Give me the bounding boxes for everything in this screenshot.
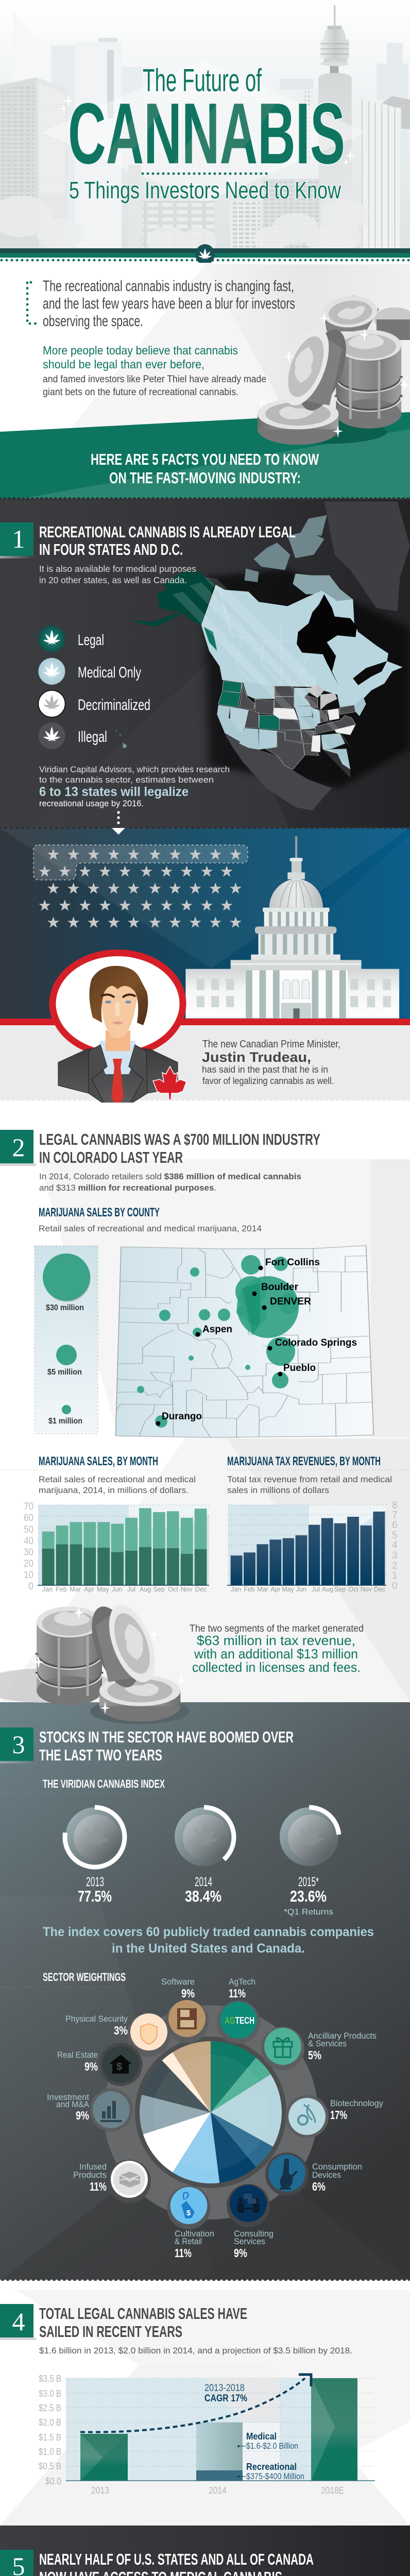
chart: marijuana tax revenues by month: 7 — [392, 1510, 398, 1521]
Viridian estimate text: Viridian Capital Advisors, which provides research — [39, 765, 230, 774]
index ring 2013 — [65, 1807, 125, 1905]
slice: Investment — [140, 2095, 211, 2134]
intro highlight text: More people today believe that cannabis — [43, 344, 238, 357]
coin sparkles — [33, 1606, 186, 1715]
label: infused — [73, 2162, 107, 2193]
slice: Physical Security — [162, 2053, 211, 2112]
chart: marijuana sales by month: 70 — [24, 1501, 33, 1512]
chart: marijuana tax revenues by month: Jun — [296, 1586, 306, 1593]
Trudeau caption: The new Canadian Prime Minister, — [202, 1039, 340, 1050]
slice: Real Estate — [142, 2060, 211, 2112]
index ring 2013: 77.5% — [78, 1887, 112, 1905]
label: physical security — [65, 2014, 128, 2037]
chart: marijuana tax revenues by month: Sep — [334, 1586, 346, 1593]
chart: marijuana tax revenues by month: Nov — [361, 1586, 372, 1593]
label: consulting — [234, 2229, 274, 2260]
chart: marijuana sales by month: Jan — [42, 1586, 53, 1593]
bubble size legend: $1 million — [48, 1417, 82, 1426]
index ring 2015: 23.6% — [290, 1887, 327, 1905]
label: consumption: 6% — [312, 2180, 326, 2193]
county map heading: Retail sales of recreational and medical marijuana, 2014 — [39, 1224, 262, 1233]
portrait — [49, 950, 186, 1109]
header band — [0, 244, 410, 265]
sector weightings pie chart — [104, 2005, 318, 2219]
Trudeau caption: favor of legalizing cannabis as well. — [202, 1076, 334, 1086]
chart: marijuana sales by month: 60 — [24, 1513, 33, 1523]
chart: legal cannabis sales: $1.5 B — [39, 2432, 61, 2443]
city markers and names — [156, 1257, 357, 1426]
chart: legal cannabis sales: $3.5 B — [39, 2374, 61, 2384]
intro lead text: observing the space. — [43, 313, 143, 330]
chart: legal cannabis sales: 2013 — [91, 2485, 109, 2496]
Viridian estimate text: 6 to 13 states will legalize — [39, 785, 189, 799]
legend: illegal — [38, 722, 107, 749]
icon: consumption devices — [265, 2153, 309, 2196]
arrow — [112, 811, 125, 835]
index heading: THE VIRIDIAN CANNABIS INDEX — [43, 1777, 165, 1790]
label: real estate: Real Estate — [57, 2050, 98, 2060]
intro lead text — [43, 278, 295, 330]
label: physical security: Physical Security — [65, 2014, 128, 2024]
section 1 heading — [39, 523, 296, 558]
medical annotation: $1.6-$2.0 Billion — [246, 2441, 298, 2451]
section 2 heading — [39, 1130, 320, 1166]
intro lead text: The recreational cannabis industry is changing fast, — [43, 278, 294, 295]
chart: marijuana tax revenues by month: Aug — [322, 1586, 333, 1593]
section 1 intro text: in 20 other states, as well as Canada. — [39, 575, 187, 585]
index coverage text: in the United States and Canada. — [112, 1941, 305, 1956]
facts banner: HERE ARE 5 FACTS YOU NEED TO KNOW — [91, 450, 319, 468]
Trudeau caption: has said in the past that he is in — [202, 1064, 328, 1075]
states highlight box — [33, 845, 248, 880]
icon: consulting services — [227, 2184, 270, 2227]
bar: 2014 — [196, 2422, 243, 2481]
label: biotechnology — [330, 2098, 383, 2122]
section 3 heading: THE LAST TWO YEARS — [39, 1746, 162, 1764]
chart: marijuana sales by month: Sep — [153, 1586, 165, 1593]
Viridian estimate text — [39, 765, 230, 808]
chart: marijuana tax revenues by month: Mar — [257, 1586, 268, 1593]
label: investment: 9% — [76, 2109, 89, 2122]
label: biotechnology: Biotechnology — [330, 2098, 383, 2108]
section 1 heading: RECREATIONAL CANNABIS IS ALREADY LEGAL — [39, 523, 296, 541]
capitol building — [185, 836, 399, 1019]
section 3: stocks — [0, 1702, 410, 2281]
legend: decriminalized — [38, 690, 150, 717]
icon: cultivation and retail: $ — [186, 2209, 191, 2217]
slice: Software — [173, 2041, 211, 2112]
section 3 heading — [39, 1728, 294, 1764]
index ring 2015: *Q1 Returns — [284, 1908, 333, 1917]
county map heading: MARIJUANA SALES BY COUNTY — [39, 1206, 160, 1219]
chart: marijuana tax revenues by month: Total tax revenue from retail and medical — [227, 1475, 392, 1484]
CAGR annotation: 2013-2018 — [204, 2383, 245, 2394]
slice: Infused — [143, 2112, 211, 2172]
chart: marijuana sales by month: 0 — [28, 1581, 33, 1592]
section 5: medical access — [0, 2526, 410, 2576]
label: agtech: AgTech — [229, 1977, 255, 1987]
map legend — [38, 625, 150, 749]
county map heading — [39, 1206, 262, 1233]
index coverage text — [43, 1925, 374, 1956]
Viridian estimate text: to the cannabis sector, estimates between — [39, 775, 214, 785]
chart: legal cannabis sales: $0.0 — [45, 2476, 61, 2486]
growth arrow — [80, 2375, 311, 2432]
label: ancillary — [308, 2031, 377, 2062]
chart: legal cannabis sales: $2.5 B — [39, 2403, 61, 2413]
section 4 paragraph: $1.6 billion in 2013, $2.0 billion in 2014, and a projection of $3.5 billion by 2018. — [39, 2346, 352, 2355]
chart: marijuana tax revenues by month: 2 — [392, 1561, 398, 1571]
chart: marijuana tax revenues by month: 4 — [392, 1540, 398, 1551]
label: real estate — [57, 2050, 98, 2073]
section 4: total sales — [0, 2282, 410, 2526]
chart: marijuana sales by month: Aug — [140, 1586, 151, 1593]
tax revenue callout: collected in licenses and fees. — [192, 1659, 361, 1675]
city markers and names: Boulder — [261, 1282, 299, 1293]
chart: marijuana sales by month: May — [97, 1586, 110, 1593]
chart: legal cannabis sales: $0.5 B — [39, 2461, 61, 2471]
label: consumption: Devices — [312, 2170, 341, 2180]
label: infused: Infused — [79, 2162, 107, 2172]
chart: marijuana sales by month — [0, 1454, 209, 1593]
chart: legal cannabis sales: $1.0 B — [39, 2447, 61, 2457]
section 1 heading: IN FOUR STATES AND D.C. — [39, 540, 183, 558]
index ring 2014: 38.4% — [185, 1887, 221, 1905]
chart: legal cannabis sales: 2018E — [321, 2485, 344, 2496]
label: consulting: 9% — [234, 2246, 247, 2260]
chart: marijuana sales by month: Mar — [70, 1586, 81, 1593]
chart: marijuana tax revenues by month: 0 — [392, 1581, 398, 1591]
city markers and names: Aspen — [202, 1324, 232, 1335]
section 5 heading — [39, 2550, 314, 2576]
chart: marijuana sales by month: Feb — [56, 1586, 67, 1593]
bubble size legend — [35, 1246, 98, 1434]
icon: ancillary products — [261, 2027, 304, 2070]
chart: marijuana tax revenues by month: Apr — [270, 1586, 281, 1593]
sparkles — [61, 94, 355, 166]
label: cultivation — [175, 2229, 214, 2260]
section 3 number badge: 3 — [12, 1730, 25, 1759]
city markers and names: Pueblo — [283, 1363, 316, 1374]
label: agtech: 11% — [229, 1987, 246, 2000]
section 1 intro text: It is also available for medical purposes — [39, 564, 196, 574]
stars — [39, 849, 242, 928]
legend: decriminalized: Decriminalized — [78, 697, 150, 714]
chart: marijuana tax revenues by month: 6 — [392, 1520, 398, 1531]
bar: 2013 — [80, 2434, 128, 2481]
label: investment: and M&A — [56, 2099, 90, 2109]
city markers and names: Colorado Springs — [275, 1337, 357, 1348]
chart: marijuana sales by month: Oct — [168, 1586, 178, 1593]
label: agtech — [229, 1977, 255, 2000]
section 2 paragraph: and $313 million for recreational purposes. — [39, 1183, 216, 1193]
intro body text: and famed investors like Peter Thiel have already made — [43, 374, 266, 385]
intro section — [0, 263, 410, 433]
label: infused: 11% — [90, 2180, 107, 2193]
section 1 number badge: 1 — [12, 524, 25, 553]
icon: infused products — [108, 2160, 151, 2203]
slice: Ancillary — [211, 2058, 271, 2112]
medical annotation — [237, 2431, 298, 2451]
section 2 heading: IN COLORADO LAST YEAR — [39, 1148, 183, 1166]
section 4 heading: SAILED IN RECENT YEARS — [39, 2323, 182, 2341]
chart: marijuana tax revenues by month: 3 — [392, 1550, 398, 1561]
recreational annotation: $375-$400 Million — [246, 2471, 304, 2481]
bubble size legend: $30 million — [46, 1303, 84, 1312]
label: software: Software — [161, 1977, 195, 1987]
city skyline — [0, 5, 410, 254]
Trudeau caption: Justin Trudeau, — [202, 1049, 311, 1065]
slice: AgTech — [211, 2041, 256, 2112]
section 4 number badge — [0, 2304, 36, 2340]
facts banner: ON THE FAST-MOVING INDUSTRY: — [109, 469, 301, 487]
chart: legal cannabis sales — [39, 2374, 375, 2496]
title: The Future of — [143, 63, 262, 98]
label: ancillary: 5% — [308, 2048, 321, 2062]
label: infused: Products — [73, 2170, 107, 2180]
tax revenue callout: with an additional $13 million — [194, 1646, 358, 1662]
intro highlight text: should be legal than ever before, — [43, 358, 204, 371]
label: cultivation: Cultivation — [175, 2229, 214, 2239]
chart: legal cannabis sales: $2.0 B — [39, 2417, 61, 2428]
chart: marijuana sales by month: marijuana, 2014, in millions of dollars. — [39, 1485, 189, 1495]
dotted bracket — [27, 282, 39, 324]
section 4 heading — [39, 2304, 247, 2341]
label: real estate: 9% — [84, 2060, 98, 2073]
label: cultivation: 11% — [175, 2246, 192, 2260]
icon: maple leaf — [153, 1066, 186, 1100]
chart: marijuana tax revenues by month: sales in millions of dollars — [227, 1485, 329, 1495]
chart: marijuana sales by month: 50 — [24, 1524, 33, 1535]
sector weightings heading: SECTOR WEIGHTINGS — [43, 1971, 126, 1984]
intro body text — [43, 374, 266, 398]
label: ancillary: & Services — [308, 2039, 347, 2048]
recreational annotation — [237, 2462, 304, 2481]
Trudeau panel — [0, 950, 410, 1109]
chart: marijuana sales by month: Nov — [181, 1586, 193, 1593]
icon: biotechnology — [285, 2095, 329, 2138]
chart: marijuana tax revenues by month: May — [282, 1586, 295, 1593]
sector labels — [47, 1977, 383, 2260]
header section — [0, 0, 410, 265]
section 3 heading: STOCKS IN THE SECTOR HAVE BOOMED OVER — [39, 1728, 294, 1746]
label: consumption: Consumption — [312, 2162, 362, 2172]
section 2 paragraph — [39, 1172, 301, 1193]
chart: marijuana tax revenues by month: Feb — [244, 1586, 255, 1593]
index ring 2015 — [279, 1807, 339, 1917]
label: investment — [47, 2092, 90, 2122]
chart: marijuana tax revenues by month: Jul — [312, 1586, 320, 1593]
section 5 number badge — [0, 2550, 33, 2576]
section 2 paragraph: In 2014, Colorado retailers sold $386 million of medical cannabis — [39, 1172, 301, 1181]
recreational annotation: Recreational — [246, 2462, 297, 2472]
icon: real estate — [99, 2043, 142, 2086]
chart: marijuana tax revenues by month: Oct — [348, 1586, 358, 1593]
label: software: 9% — [181, 1987, 195, 2000]
facts banner — [0, 412, 410, 499]
city markers and names: DENVER — [270, 1296, 311, 1307]
chart: legal cannabis sales: $3.0 B — [39, 2388, 61, 2399]
intro highlight text — [43, 344, 238, 371]
section 2 number badge — [0, 1130, 36, 1166]
map of North America — [115, 501, 410, 810]
chart: marijuana sales by month: Retail sales of recreational and medical — [39, 1475, 196, 1484]
chart: marijuana sales by month: 40 — [24, 1536, 33, 1547]
icon: cultivation and retail — [167, 2186, 210, 2229]
label: cultivation: & Retail — [175, 2236, 202, 2246]
intro body text: giant bets on the future of recreational cannabis. — [43, 387, 238, 398]
chart: marijuana tax revenues by month: 8 — [392, 1500, 398, 1511]
icon: investment — [90, 2088, 133, 2131]
tax revenue callout: $63 million in tax revenue, — [197, 1633, 355, 1648]
legend: illegal: Illegal — [78, 728, 107, 745]
capitol section — [0, 811, 410, 1025]
icon: real estate: $ — [116, 2061, 122, 2073]
label: consulting: Consulting — [234, 2229, 274, 2239]
county bubbles — [137, 1255, 299, 1428]
icon: software — [165, 2000, 209, 2043]
label: physical security: 3% — [114, 2024, 128, 2037]
chart: marijuana tax revenues by month: Jan — [231, 1586, 241, 1593]
index ring 2015: 2015* — [298, 1875, 319, 1889]
label: biotechnology: 17% — [330, 2108, 347, 2122]
legend: medical only — [38, 658, 141, 685]
Trudeau caption — [202, 1039, 340, 1086]
bar: 2018E — [311, 2378, 357, 2481]
chart: marijuana sales by month: Jun — [112, 1586, 122, 1593]
index ring 2014: 2014 — [195, 1875, 212, 1889]
city markers and names: Durango — [162, 1411, 202, 1422]
index coverage text: The index covers 60 publicly traded cannabis companies — [43, 1925, 374, 1939]
intro lead text: and the last few years have been a blur for investors — [43, 295, 295, 312]
CAGR annotation — [204, 2383, 247, 2404]
chart: marijuana sales by month: 20 — [24, 1558, 33, 1569]
label: investment: Investment — [47, 2092, 89, 2102]
chart: marijuana sales by month: 30 — [24, 1547, 33, 1558]
medical annotation: Medical — [246, 2431, 277, 2442]
icon: agtech — [217, 2001, 260, 2044]
Colorado county map — [115, 1246, 373, 1437]
section 1 intro text — [39, 564, 196, 585]
chart: marijuana sales by month: 10 — [24, 1570, 33, 1581]
CAGR annotation: CAGR 17% — [204, 2393, 247, 2404]
index ring 2014 — [174, 1807, 234, 1905]
slice: Biotechnology — [211, 2074, 282, 2146]
icon: coin stack — [257, 292, 410, 445]
label: ancillary: Ancilliary Products — [308, 2031, 377, 2041]
chart: marijuana sales by month: Jul — [127, 1586, 135, 1593]
tax revenue callout: The two segments of the market generated — [190, 1623, 364, 1634]
legend: medical only: Medical Only — [78, 664, 141, 681]
Viridian estimate text: recreational usage by 2016. — [39, 799, 144, 808]
section 4 number badge: 4 — [12, 2307, 25, 2336]
icon: agtech: AGTECH — [225, 2015, 254, 2026]
icon: physical security — [127, 2013, 170, 2057]
chart: legal cannabis sales: 2014 — [209, 2485, 227, 2496]
slice: Cultivation — [173, 2112, 219, 2183]
chart: marijuana sales by month: MARIJUANA SALES, BY MONTH — [39, 1454, 158, 1468]
index ring 2013: 2013 — [86, 1875, 104, 1889]
title: 5 Things Investors Need to Know — [69, 177, 341, 204]
chart: marijuana tax revenues by month: 5 — [392, 1530, 398, 1541]
label: consumption — [312, 2162, 362, 2193]
legend: legal — [38, 625, 104, 652]
legend: legal: Legal — [78, 632, 104, 649]
section 1 number badge — [0, 522, 33, 558]
bubble size legend: $5 million — [47, 1368, 82, 1377]
chart: marijuana tax revenues by month: Dec — [374, 1586, 385, 1593]
city markers and names: Fort Collins — [265, 1257, 320, 1268]
slice: Consulting — [211, 2112, 256, 2183]
label: consulting: Services — [234, 2236, 265, 2246]
section 2 number badge: 2 — [12, 1133, 25, 1162]
icon: coin stack 2 — [0, 1602, 190, 1724]
section 2: Colorado — [0, 1103, 410, 1702]
chart: marijuana sales by month: Dec — [195, 1586, 207, 1593]
slice: Consumption — [211, 2112, 273, 2167]
section 1: legal status — [0, 499, 410, 828]
chart: marijuana tax revenues by month — [227, 1454, 410, 1593]
section 3 number badge — [0, 1727, 33, 1764]
label: software — [161, 1977, 195, 2000]
title — [68, 63, 345, 204]
chart: marijuana sales by month: Apr — [84, 1586, 94, 1593]
section 4 heading: TOTAL LEGAL CANNABIS SALES HAVE — [39, 2304, 247, 2323]
tax revenue callout — [190, 1623, 364, 1675]
chart: marijuana tax revenues by month: 1 — [392, 1570, 398, 1581]
